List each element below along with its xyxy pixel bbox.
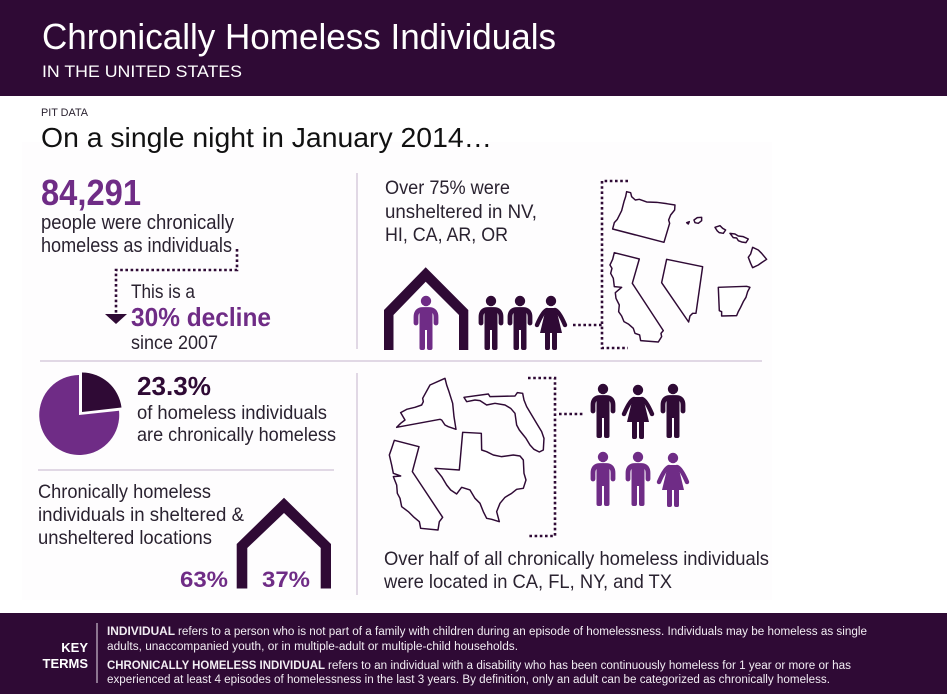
Hawaii [687,217,767,268]
definition: chronically homeless individual: experienced at least 4 episodes of homelessness in the last 3 years. By definition, only an adult can be categorized as chronically homeless. [107,674,830,686]
text: over 75% unsheltered: unsheltered in NV, [385,201,537,223]
connector: dotted bracket [528,378,585,536]
callout: 30% decline: 30% decline [131,302,271,332]
description: chronically homeless individuals: people were chronically [41,212,234,234]
Nevada [662,259,703,322]
heading: key terms: KEY [61,640,88,655]
callout: 30% decline [131,281,271,354]
text: over half of individuals [383,548,769,593]
header banner [0,0,947,96]
Florida [464,393,544,452]
panel: over 75% unsheltered [384,177,767,350]
panel: pie chart 23.3% [39,371,336,455]
definition: chronically homeless individual: CHRONICALLY HOMELESS INDIVIDUAL [107,660,325,672]
panel: over half in four states [383,378,769,593]
statistic: 23.3%: 23.3% [137,371,211,401]
icon: purple people row [593,452,687,507]
footer: key terms [0,613,947,694]
heading: key terms: TERMS [42,656,88,671]
definition: chronically homeless individual [107,660,851,686]
text: over 75% unsheltered [385,177,537,246]
definition: individual [107,626,867,653]
definition: individual: INDIVIDUAL [107,626,175,638]
connector: dotted bracket [573,181,628,348]
label: 63%: 63% [180,567,228,592]
definition: chronically homeless individual: refers to an individual with a disability who has been continuously homeless for 1 year or more or has [328,660,851,672]
text: over half of individuals: Over half of all chronically homeless individuals [384,548,769,570]
New York [397,378,456,429]
text: sheltered and unsheltered locations: unsheltered locations [38,527,212,549]
title: Chronically Homeless Individuals [42,16,556,57]
text: sheltered and unsheltered locations: Chronically homeless [38,481,211,503]
text: over 75% unsheltered: HI, CA, AR, OR [385,224,508,246]
callout: 30% decline: since 2007 [131,333,218,354]
description: share chronically homeless [137,402,336,446]
statistic: 84,291: 84,291 [41,172,141,213]
icon: house with person [384,267,468,350]
heading: key terms [42,640,88,671]
Texas [435,432,526,522]
pie chart [39,372,122,455]
description: share chronically homeless: are chronically homeless [137,424,336,446]
Arkansas [718,286,750,316]
map: NY, FL, CA, TX outlines [389,378,544,530]
section heading: PIT DATA [41,107,89,119]
icon: three people [481,296,565,350]
definition: individual: refers to a person who is not part of a family with children during an episode of homelessness. Individuals may be homeless as single [178,626,867,638]
section heading: On a single night in January 2014… [41,122,492,153]
California [389,440,443,530]
description: chronically homeless individuals [41,212,234,257]
panel: total count and decline [41,172,271,354]
subtitle: IN THE UNITED STATES [42,62,242,81]
section heading [41,107,492,153]
definition: individual: adults, unaccompanied youth, or in multiple-adult or multiple-child households. [107,641,518,653]
California [610,253,663,342]
text: over 75% unsheltered: Over 75% were [385,177,510,199]
callout: 30% decline: This is a [131,281,195,303]
icon: dark people row [593,384,683,439]
text: over half of individuals: were located in CA, FL, NY, and TX [383,571,672,593]
label: 37%: 37% [262,567,310,592]
icon: house outline [237,498,331,588]
panel: sheltered and unsheltered [38,481,331,592]
Oregon [613,192,675,242]
text: sheltered and unsheltered locations [38,481,244,549]
description: chronically homeless individuals: homeless as individuals [41,235,232,257]
description: share chronically homeless: of homeless individuals [137,402,327,424]
text: sheltered and unsheltered locations: individuals in sheltered & [38,504,244,526]
map: NV, HI, CA, AR, OR outlines [610,192,767,342]
arrow: dotted connector to decline [105,249,237,324]
